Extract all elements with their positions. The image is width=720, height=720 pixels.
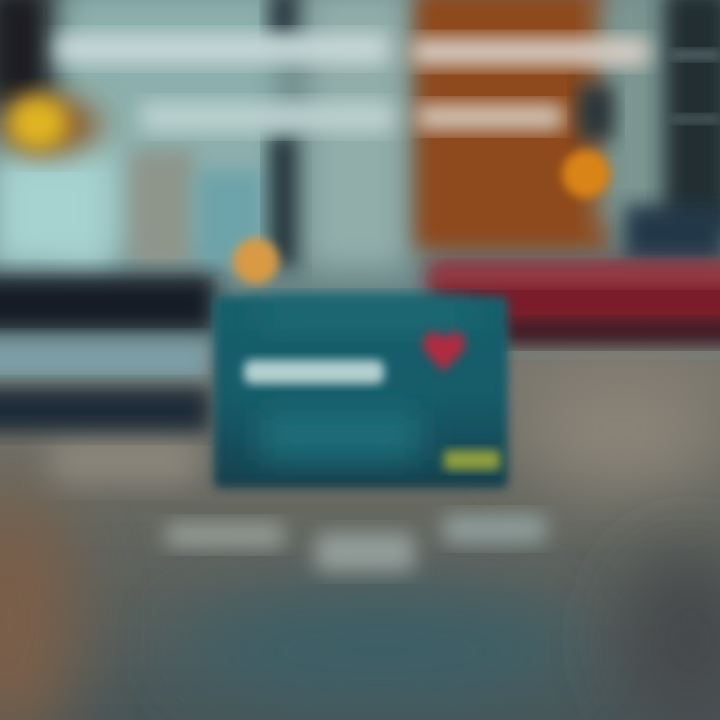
- glowing orbs: [0, 96, 610, 284]
- blurred caption labels under card: [165, 514, 547, 572]
- dark shelf left: [0, 276, 215, 432]
- card chip: [444, 450, 500, 470]
- card number band: [244, 360, 384, 384]
- card lower sheen: [260, 410, 420, 460]
- credit card: [214, 296, 508, 488]
- table surface: [0, 350, 720, 720]
- card heart mark: [423, 332, 465, 372]
- red band right: [430, 264, 720, 344]
- card highlight: [260, 300, 470, 330]
- floor tints: [0, 370, 720, 720]
- background wall: [0, 0, 720, 360]
- blurred heading text bands: [55, 34, 650, 140]
